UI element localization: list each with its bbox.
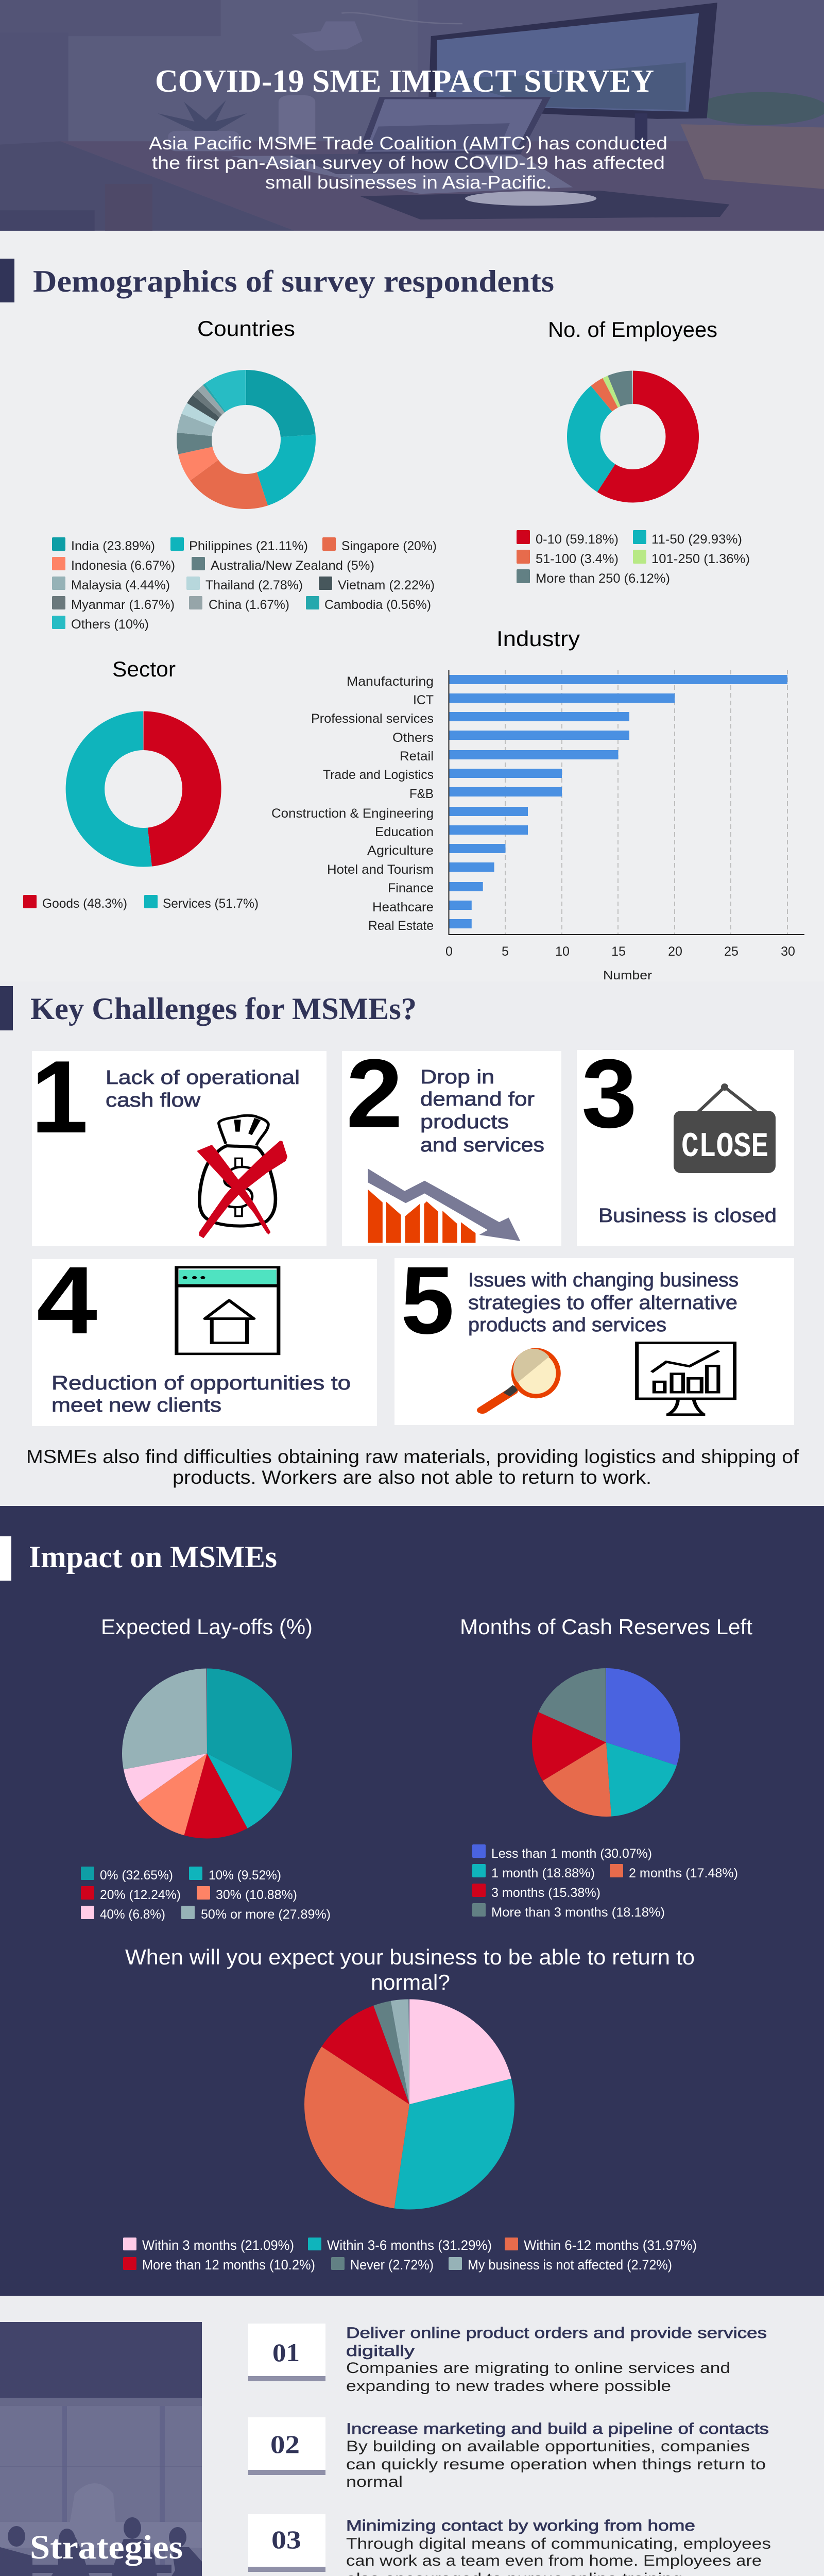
legend: cash reserves: 1 month (18.88%)	[491, 1866, 595, 1880]
legend: cash reserves: More than 3 months (18.18%)	[491, 1905, 665, 1920]
text	[346, 2420, 769, 2490]
hero photo: desk with monitor and laptop	[0, 0, 824, 231]
number box	[248, 2324, 325, 2381]
axis tick labels: 20	[668, 944, 682, 959]
intro text	[149, 133, 667, 193]
text: digitally	[346, 2343, 415, 2360]
legend: employees: 51-100 (3.4%)	[536, 552, 619, 566]
legend: return to normal: My business is not affected (2.72%)	[468, 2257, 672, 2273]
section accent bar: demographics	[0, 259, 14, 302]
icon: crossed-out money bag	[197, 1115, 287, 1238]
legend: countries: Philippines (21.11%)	[189, 539, 308, 553]
number 5: 5	[401, 1247, 454, 1354]
icon: close sign: CLOSE	[681, 1127, 768, 1167]
axis tick labels: 5	[502, 944, 509, 959]
category labels: Finance	[388, 881, 434, 895]
text: normal	[346, 2473, 403, 2490]
intro text: small businesses in Asia-Pacific.	[265, 173, 552, 193]
legend: expected lay-offs	[81, 1867, 331, 1922]
chart title: Industry	[496, 626, 580, 651]
axis tick labels: 10	[555, 944, 570, 959]
category labels: Construction & Engineering	[271, 806, 434, 821]
text: Issues with changing business	[468, 1269, 739, 1291]
axis tick labels: 15	[611, 944, 626, 959]
legend: sector: Goods (48.3%)	[42, 896, 127, 911]
text: Deliver online product orders and provide services	[346, 2325, 767, 2342]
text	[346, 2325, 767, 2395]
legend: cash reserves: 3 months (15.38%)	[491, 1886, 600, 1900]
chart title: Countries	[197, 316, 295, 341]
text	[52, 1372, 351, 1416]
category labels: Heathcare	[372, 900, 434, 914]
legend: countries: China (1.67%)	[209, 598, 289, 612]
legend: sector	[23, 895, 259, 911]
axis title: Number	[603, 969, 652, 982]
axis tick labels: 25	[724, 944, 739, 959]
legend: countries: Indonesia (6.67%)	[71, 558, 175, 573]
legend: cash reserves: Less than 1 month (30.07%)	[491, 1846, 652, 1861]
panel: challenge 3	[577, 1039, 794, 1246]
chart title: expected lay-offs: Expected Lay-offs (%)	[101, 1615, 313, 1639]
legend: return to normal: Within 3 months (21.09%)	[142, 2238, 294, 2253]
pie chart: cash reserves	[569, 1705, 643, 1780]
title: Strategies	[30, 2529, 183, 2566]
legend: countries	[52, 537, 437, 632]
panel: strategies taken	[0, 2322, 202, 2576]
axis tick labels: 30	[781, 944, 795, 959]
donut: employees	[583, 387, 682, 486]
heading: key challenges: Key Challenges for MSMEs?	[30, 992, 417, 1026]
legend: return to normal	[123, 2238, 697, 2273]
text: cash flow	[106, 1090, 201, 1111]
category labels: Education	[375, 825, 434, 839]
bars	[449, 675, 787, 928]
text: demand for	[420, 1089, 535, 1110]
title: COVID-19 SME IMPACT SURVEY	[155, 64, 654, 99]
legend: return to normal: Never (2.72%)	[350, 2257, 434, 2273]
icon: close sign	[674, 1083, 776, 1173]
legend: cash reserves: 2 months (17.48%)	[629, 1866, 738, 1880]
text: Through digital means of communicating, employees	[346, 2535, 771, 2552]
category labels: Professional services	[311, 711, 434, 726]
axis tick labels: 0	[445, 944, 453, 959]
legend: sector: Services (51.7%)	[163, 896, 259, 911]
category labels: F&B	[409, 787, 434, 801]
text: meet new clients	[52, 1395, 221, 1416]
legend: expected lay-offs: 30% (10.88%)	[216, 1888, 297, 1902]
text: Business is closed	[598, 1205, 777, 1227]
strategy 03	[248, 2514, 771, 2576]
number 2: 2	[346, 1039, 403, 1148]
text: strategies to offer alternative	[468, 1292, 737, 1314]
pie chart: return to normal	[357, 2052, 462, 2157]
chart title: No. of Employees	[548, 317, 717, 342]
number 3: 3	[581, 1039, 637, 1148]
legend: countries: Others (10%)	[71, 617, 149, 632]
legend: expected lay-offs: 10% (9.52%)	[209, 1868, 281, 1883]
number 4: 4	[37, 1247, 97, 1354]
text: Minimizing contact by working from home	[346, 2517, 695, 2534]
heading: demographics: Demographics of survey respondents	[33, 264, 554, 298]
pie chart: expected lay-offs	[165, 1711, 249, 1796]
legend: countries: Thailand (2.78%)	[205, 578, 303, 592]
intro text: Asia Pacific MSME Trade Coalition (AMTC) has conducted	[149, 133, 667, 154]
legend: countries: Singapore (20%)	[341, 539, 437, 553]
number box: 03	[271, 2525, 301, 2554]
panel: hero header	[0, 0, 824, 231]
chart: countries	[52, 316, 437, 632]
legend: return to normal: Within 6-12 months (31.97%)	[524, 2238, 697, 2253]
legend: return to normal: Within 3-6 months (31.29%)	[327, 2238, 492, 2253]
category labels: Hotel and Tourism	[327, 862, 434, 877]
legend: countries: Malaysia (4.44%)	[71, 578, 170, 592]
legend: employees: 11-50 (29.93%)	[651, 532, 742, 547]
text: products and services	[468, 1314, 666, 1336]
icon: browser window with house	[177, 1267, 279, 1354]
photo: silhouettes of seated people	[0, 2517, 202, 2576]
text	[346, 2517, 771, 2576]
category labels: Retail	[400, 749, 434, 764]
donut: sector	[85, 731, 202, 848]
legend: countries: Australia/New Zealand (5%)	[211, 558, 374, 573]
intro text: the first pan-Asian survey of how COVID-19 has affected	[152, 153, 665, 173]
legend: employees: 101-250 (1.36%)	[651, 552, 750, 566]
legend: expected lay-offs: 50% or more (27.89%)	[201, 1907, 331, 1922]
chart title: cash reserves: Months of Cash Reserves Left	[460, 1615, 752, 1639]
legend: cash reserves	[472, 1844, 738, 1920]
category labels: Trade and Logistics	[323, 768, 434, 782]
legend: employees	[517, 530, 750, 586]
chart title: Sector	[112, 657, 176, 681]
chart title: return to normal: normal?	[371, 1970, 450, 1994]
text	[420, 1066, 544, 1156]
panel: challenge 2	[342, 1039, 561, 1246]
legend: countries: Vietnam (2.22%)	[338, 578, 435, 592]
text: can quickly resume operation when things return to	[346, 2456, 766, 2473]
chart title: return to normal	[125, 1945, 695, 1994]
number box	[248, 2514, 325, 2572]
number box: 02	[270, 2430, 300, 2459]
legend: employees: 0-10 (59.18%)	[536, 532, 619, 547]
category labels: ICT	[413, 693, 434, 707]
number box	[248, 2417, 325, 2475]
text: Reduction of opportunities to	[52, 1372, 351, 1394]
text: Drop in	[420, 1066, 494, 1088]
text: products	[420, 1111, 509, 1133]
text: can work as a team even from home. Employees are	[346, 2552, 762, 2569]
legend: expected lay-offs: 20% (12.24%)	[100, 1888, 181, 1902]
legend: return to normal: More than 12 months (10.2%)	[142, 2257, 315, 2273]
text	[106, 1067, 300, 1111]
legend: expected lay-offs: 40% (6.8%)	[100, 1907, 165, 1922]
chart: sector	[23, 657, 259, 911]
legend: countries: Myanmar (1.67%)	[71, 598, 175, 612]
panel: impact on MSMEs	[0, 1506, 824, 2296]
text block: challenges note	[26, 1446, 799, 1488]
number box: 01	[272, 2338, 300, 2367]
icon: monitor with rising chart	[637, 1343, 735, 1415]
panel: challenge 4	[32, 1247, 377, 1426]
axis tick labels	[445, 944, 795, 959]
legend: countries: Cambodia (0.56%)	[324, 598, 431, 612]
chart title: return to normal: When will you expect your business to be able to return to	[125, 1945, 695, 1969]
legend: employees: More than 250 (6.12%)	[536, 571, 670, 586]
category labels: Agriculture	[367, 843, 434, 858]
chart: number of employees	[517, 317, 750, 586]
panel: challenge 5	[394, 1247, 794, 1425]
section accent bar: key challenges	[0, 986, 13, 1030]
panel: challenge 1	[31, 1040, 327, 1246]
text: and services	[420, 1134, 544, 1156]
icon: magnifying glass	[483, 1348, 561, 1410]
text: Lack of operational	[106, 1067, 300, 1089]
legend: countries: India (23.89%)	[71, 539, 155, 553]
icon: falling bar chart with arrow	[368, 1168, 520, 1243]
text: By building on available opportunities, companies	[346, 2438, 750, 2455]
category labels: Others	[392, 731, 434, 745]
strategy 02	[248, 2417, 769, 2490]
legend: expected lay-offs: 0% (32.65%)	[100, 1868, 173, 1883]
strategy 01	[248, 2324, 767, 2395]
donut: countries	[194, 387, 298, 492]
text: Companies are migrating to online services and	[346, 2360, 730, 2377]
heading: Impact on MSMEs	[29, 1540, 277, 1574]
text block: challenges note: MSMEs also find difficulties obtaining raw materials, providing logistics and shipping of	[26, 1446, 799, 1467]
text: expanding to new trades where possible	[346, 2378, 671, 2395]
text block: challenges note: products. Workers are also not able to return to work.	[173, 1467, 651, 1488]
section accent bar	[0, 1536, 11, 1581]
number 1: 1	[31, 1040, 88, 1155]
category labels	[271, 674, 434, 933]
category labels: Real Estate	[368, 919, 434, 933]
text	[468, 1269, 739, 1336]
category labels: Manufacturing	[347, 674, 434, 689]
chart: industry bar chart	[271, 626, 804, 982]
text: Increase marketing and build a pipeline of contacts	[346, 2420, 769, 2437]
